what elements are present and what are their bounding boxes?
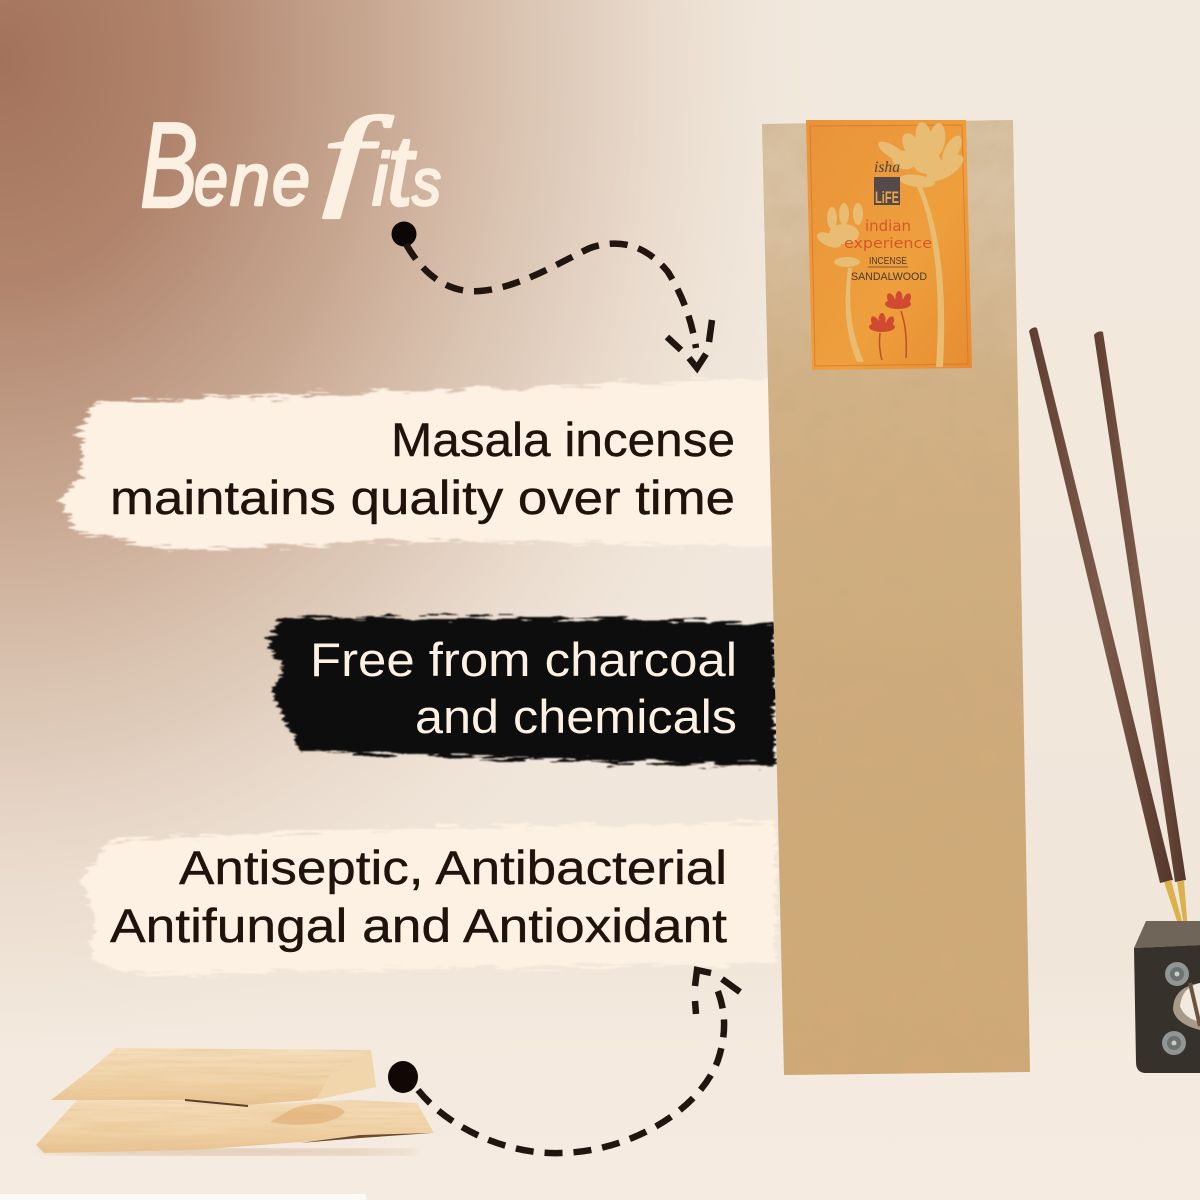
- title: Benefits: e: [272, 138, 310, 221]
- arrow: wood to third point: [388, 970, 740, 1153]
- label text: INCENSE: [869, 256, 907, 267]
- text: antiseptic: Antiseptic, Antibacterial: [179, 841, 727, 894]
- text: free from charcoal: [310, 633, 737, 743]
- title: Benefits: B: [140, 97, 198, 233]
- logo: isha life: [874, 159, 900, 207]
- label text: [844, 217, 932, 283]
- text: free from charcoal: Free from charcoal: [310, 633, 737, 686]
- label text: indian: [865, 217, 911, 235]
- logo: isha life: LiFE: [875, 188, 899, 207]
- title: Benefits: n: [230, 138, 270, 221]
- brush stroke: second benefit: [268, 616, 775, 766]
- label text: SANDALWOOD: [851, 271, 927, 283]
- title: Benefits: s: [412, 145, 441, 219]
- title: Benefits: e: [194, 138, 228, 221]
- arrow: benefits to first point: [392, 222, 712, 368]
- text: masala incense: Masala incense: [391, 413, 735, 466]
- brush stroke: first benefit: [60, 378, 775, 550]
- text: free from charcoal: and chemicals: [415, 690, 737, 743]
- title: Benefits: [140, 95, 441, 233]
- icon: red lotuses: [869, 291, 913, 360]
- title: Benefits: t: [387, 115, 417, 227]
- logo: isha life: isha: [874, 159, 900, 176]
- text: antiseptic: Antifungal and Antioxidant: [110, 899, 727, 952]
- illustration: sandalwood pieces: [36, 1048, 434, 1155]
- icon: large pale lotus: [875, 121, 968, 367]
- text: masala incense: [110, 413, 735, 524]
- label: orange sticker: [806, 120, 972, 370]
- product: incense holder block: [1134, 921, 1200, 1073]
- brush stroke: third benefit: [82, 822, 775, 976]
- product: kraft paper bag: [762, 120, 1030, 1075]
- title: Benefits: i: [372, 138, 390, 221]
- label text: experience: [844, 236, 932, 252]
- title: Benefits: f: [322, 95, 394, 219]
- text: antiseptic: [110, 841, 727, 952]
- text: masala incense: maintains quality over time: [110, 471, 735, 524]
- product: incense sticks: [1029, 327, 1188, 933]
- icon: small pale lotus: [815, 203, 864, 362]
